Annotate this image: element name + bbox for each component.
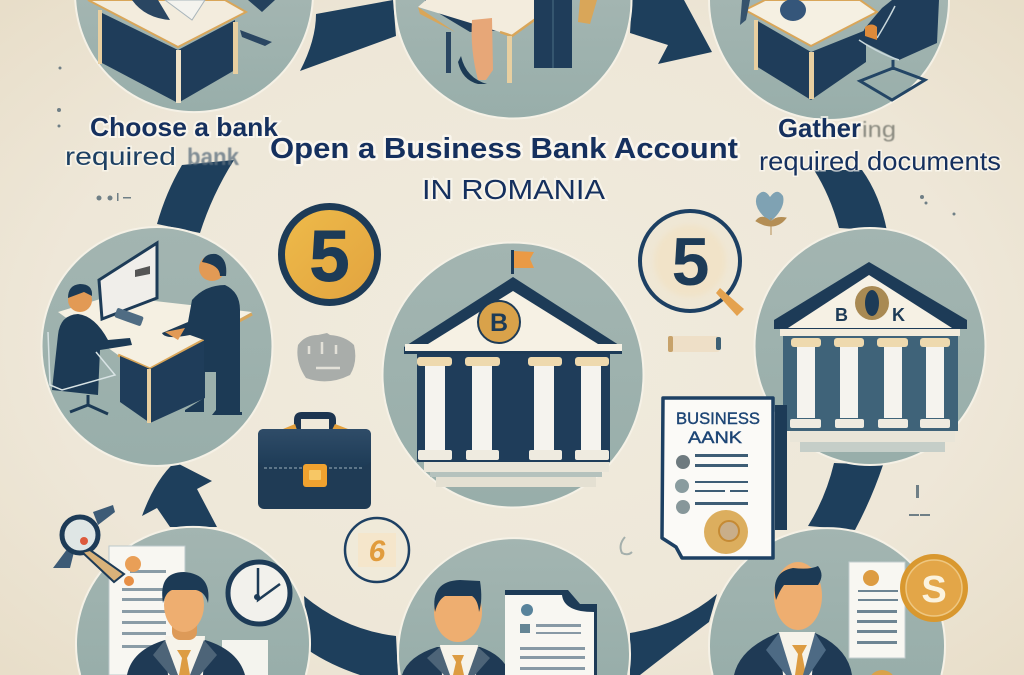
- document: [505, 590, 597, 675]
- panel: top right desk scene: [709, 0, 949, 120]
- arrow: top right to middle right: [814, 170, 887, 231]
- document: [849, 562, 905, 658]
- arrow: bottom right to bottom centre: [630, 594, 717, 675]
- arrow: bottom centre to bottom left: [304, 596, 398, 675]
- list rows: [675, 454, 748, 514]
- badge: magnifier number 5: [640, 211, 744, 316]
- title: Open a Business Bank Account: [270, 133, 738, 165]
- badge: gold number 5: [282, 206, 378, 302]
- step label: gather required documents: Gather: [778, 113, 861, 143]
- panel: top middle meeting scene: [394, 0, 632, 119]
- step label: gather required documents: required documents: [759, 146, 1001, 176]
- person: [734, 562, 852, 675]
- icon: faint swirl mark: [621, 537, 632, 554]
- panel: bottom centre applicant: [398, 538, 630, 675]
- office chair: [859, 0, 939, 100]
- panel: top left desk scene: [75, 0, 313, 112]
- icon: rolled paper: [668, 336, 721, 352]
- panel: central bank building: [382, 242, 644, 508]
- arrow: top left to top middle: [300, 0, 396, 71]
- columns: [790, 338, 950, 428]
- bank sign: BK: [835, 305, 905, 325]
- gold seal: [704, 510, 748, 554]
- icon: small round seal: 6: [369, 535, 386, 568]
- icon: briefcase: [258, 412, 371, 509]
- columns: [417, 357, 609, 460]
- arrow: top middle to top right: [630, 0, 712, 64]
- step label: choose a bank: bank: [187, 144, 240, 171]
- panel: middle left consultation scene: [42, 227, 272, 466]
- icon: small round seal: [345, 518, 409, 582]
- arrow: middle left to top left: [157, 160, 234, 233]
- person: [402, 580, 510, 675]
- icon: orange flag: [511, 250, 534, 274]
- icon: bank coin: B: [490, 309, 508, 337]
- step label: gather required documents: ing: [862, 117, 896, 142]
- icon: small plant: [756, 192, 786, 235]
- arrow: bottom left pointing up: [142, 462, 217, 527]
- icon: gold dollar coin: [900, 554, 968, 622]
- panel: bottom right applicant: [709, 528, 945, 675]
- icon: grey crown ornament: [297, 333, 355, 381]
- title: [270, 133, 738, 205]
- step label: choose a bank: required: [65, 143, 176, 171]
- icon: small decorative specks: [57, 66, 956, 516]
- icon: bank emblem: [855, 286, 889, 320]
- step label: choose a bank: Choose a bank: [90, 112, 279, 142]
- arrow: middle right to bottom right: [808, 463, 883, 530]
- badge: magnifier number 5: 5: [672, 224, 709, 300]
- document subheading: AANK: [688, 428, 743, 447]
- step label: choose a bank: [65, 112, 279, 171]
- icon: bank coin: [478, 301, 520, 343]
- document: business bank form: [662, 398, 787, 558]
- person: [127, 572, 245, 675]
- icon: gold dollar coin: S: [921, 569, 947, 611]
- panel: right bank building: [754, 228, 986, 465]
- icon: wall clock: [228, 562, 290, 624]
- badge: gold number 5: 5: [309, 217, 350, 297]
- document: [109, 546, 185, 675]
- document heading: BUSINESS: [676, 409, 760, 428]
- step label: gather required documents: [759, 113, 1001, 176]
- title: IN ROMANIA: [422, 174, 605, 205]
- icon: magnifying glass with tools: [53, 505, 134, 586]
- panel: bottom left applicant: [76, 527, 310, 675]
